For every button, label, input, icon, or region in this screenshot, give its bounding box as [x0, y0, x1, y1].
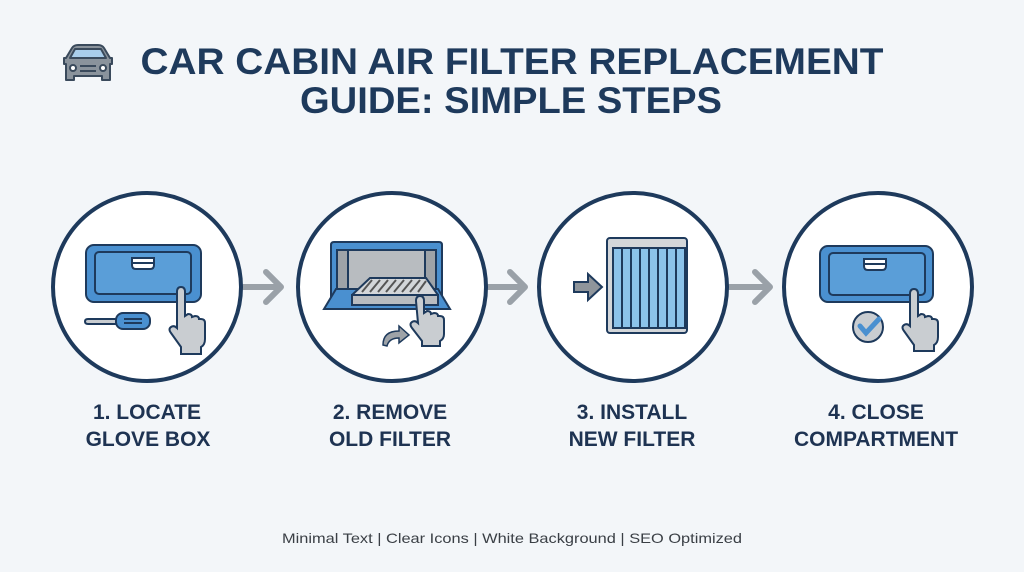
icon: glove box — [86, 245, 201, 302]
title — [140, 41, 884, 121]
label: step 4 — [794, 401, 958, 451]
icon: car — [64, 45, 112, 80]
title: CAR CABIN AIR FILTER REPLACEMENT — [140, 41, 884, 82]
label: step 2: OLD FILTER — [329, 428, 451, 451]
icon: check — [853, 312, 883, 342]
icon: insert arrow — [574, 274, 602, 300]
arrow 2 — [486, 272, 525, 302]
icon: filter pulled — [352, 278, 438, 305]
title: GUIDE: SIMPLE STEPS — [300, 80, 722, 121]
icon: screwdriver — [85, 313, 150, 329]
label: step 3: NEW FILTER — [569, 428, 695, 451]
label: step 3 — [569, 401, 695, 451]
icon: closed glove box — [820, 246, 933, 302]
arrow 1 — [243, 272, 281, 302]
panel: step 4 — [784, 193, 972, 381]
footer: Minimal Text | Clear Icons | White Background | SEO Optimized — [282, 530, 742, 546]
label: step 4: COMPARTMENT — [794, 428, 958, 451]
icon: hand — [902, 289, 938, 351]
label: step 4: 4. CLOSE — [828, 401, 924, 424]
label: step 2: 2. REMOVE — [333, 401, 447, 424]
icon: hand and curved arrow — [410, 296, 444, 346]
arrow 3 — [729, 272, 770, 302]
label: step 1 — [86, 401, 210, 451]
panel: step 1 — [53, 193, 241, 381]
label: step 1: GLOVE BOX — [86, 428, 210, 451]
label: step 3: 3. INSTALL — [577, 401, 687, 424]
label: step 2 — [329, 401, 451, 451]
label: step 1: 1. LOCATE — [93, 401, 201, 424]
icon: open glove box — [324, 242, 450, 309]
panel: step 2 — [298, 193, 486, 381]
icon: hand — [170, 287, 205, 354]
panel: step 3 — [539, 193, 727, 381]
icon: new filter — [607, 238, 687, 333]
